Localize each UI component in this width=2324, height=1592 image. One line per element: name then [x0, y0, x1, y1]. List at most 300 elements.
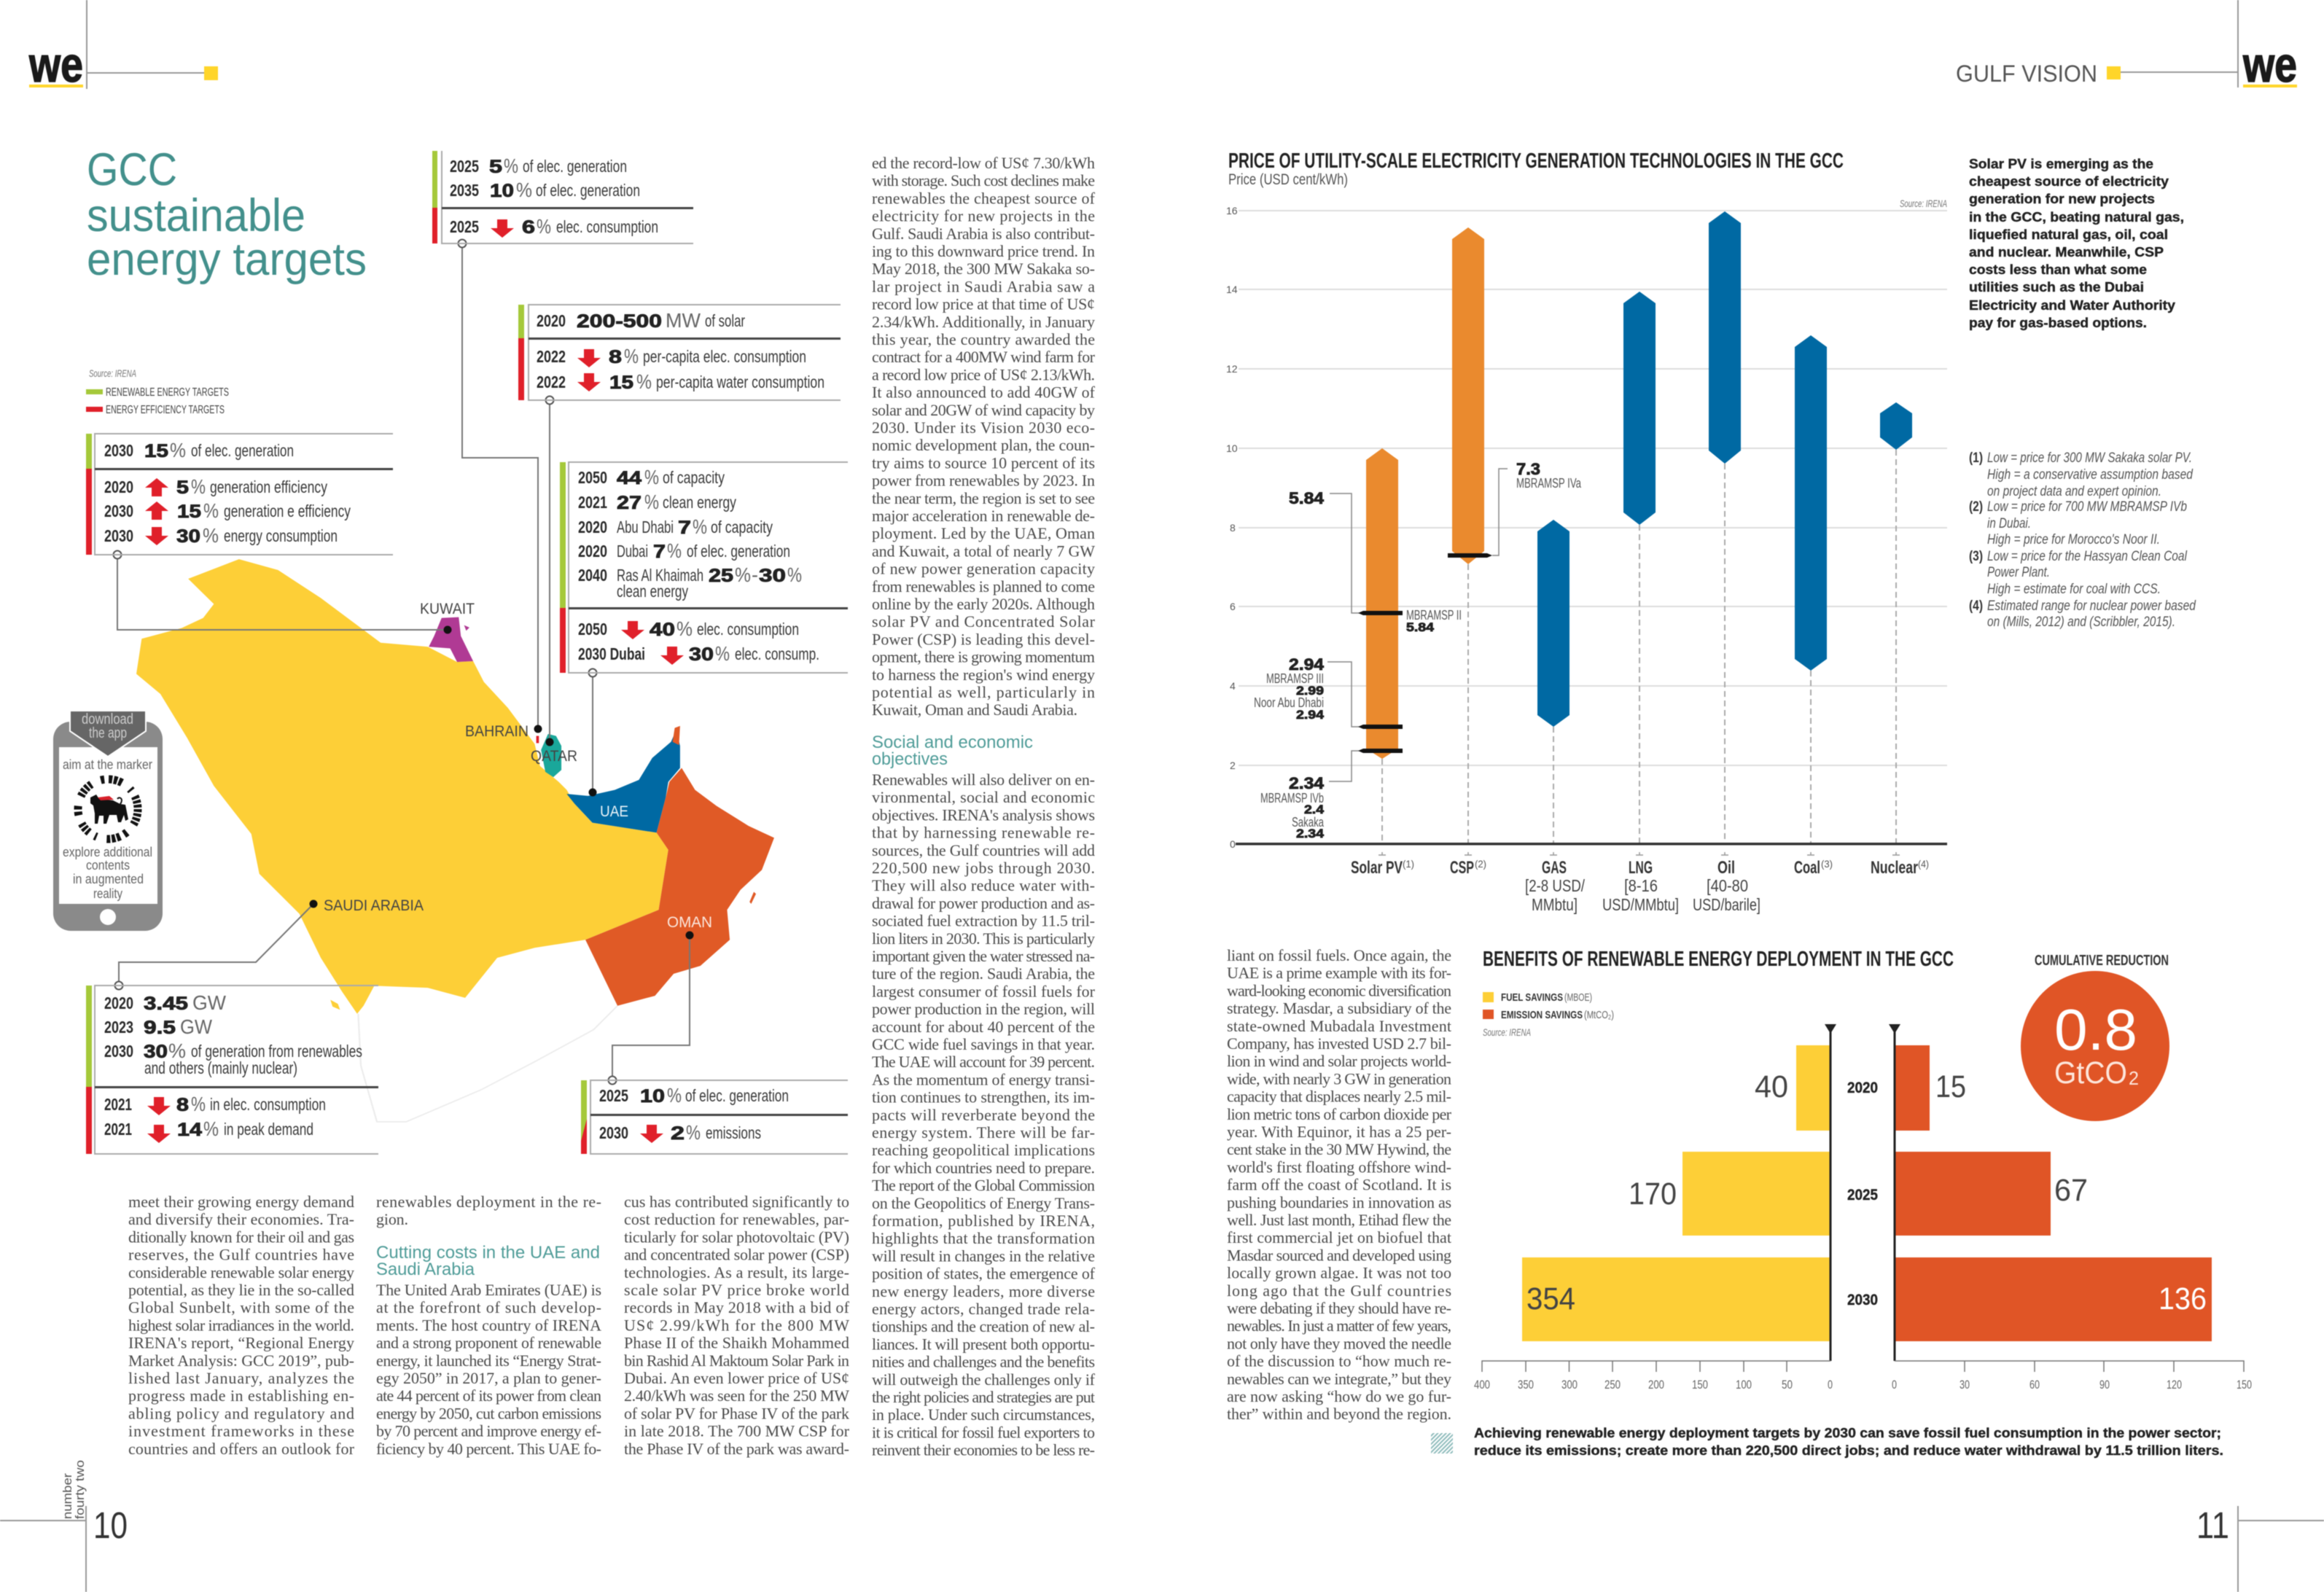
legend: (MBOE)	[1564, 991, 1592, 1004]
footnotes: on (Mills, 2012) and (Scribbler, 2015).	[1987, 614, 2175, 630]
row: 2035 10%: %	[516, 179, 532, 201]
article text column 4	[872, 154, 1096, 1459]
row: 2021 8%: in elec. consumption	[210, 1095, 326, 1114]
icon: phone, download the app	[53, 711, 163, 931]
row: 2022 8%: 2022	[537, 347, 566, 366]
row: 2021 27%: 2021	[578, 493, 607, 512]
connector lines	[114, 239, 694, 1085]
bars: emission savings: 136	[2159, 1281, 2207, 1316]
article text right page: wide, with nearly 3 GW in generation	[1227, 1069, 1451, 1088]
row: 2030 30%: energy consumption	[224, 526, 338, 545]
axes: 250	[1604, 1378, 1621, 1392]
article text right page: newables can we integrate,” but they	[1227, 1370, 1451, 1388]
axes: 150	[2237, 1378, 2252, 1392]
article text column 1: progress made in establishing en-	[128, 1386, 354, 1405]
category labels: Oil	[1717, 858, 1735, 878]
row: 2021 8%: %	[191, 1093, 206, 1115]
article text column 3: 2.40/kWh was seen for the 250 MW	[624, 1386, 849, 1405]
row: 2030 15%: %	[170, 439, 186, 461]
axes: 150	[1692, 1378, 1708, 1392]
country: Oman	[585, 726, 774, 1006]
article text column 4: Gulf. Saudi Arabia is also contribut-	[872, 225, 1095, 243]
axes: 400	[1474, 1378, 1490, 1392]
article text column 3: Dubai. An even lower price of US¢	[624, 1369, 849, 1387]
legend: targets: Source: IRENA	[89, 367, 136, 379]
category labels: Nuclear	[1871, 858, 1918, 878]
article text column 4: the right policies and strategies are put	[872, 1388, 1095, 1406]
y axis labels: 6	[1230, 601, 1236, 612]
article text column 4: liances. It will present both opportu-	[872, 1335, 1095, 1353]
article text column 1: abling policy and regulatory and	[128, 1404, 354, 1422]
row: 2025 5%: 5	[489, 157, 502, 177]
article text column 1: Market Analysis: GCC 2019”, pub-	[128, 1351, 354, 1370]
row: 2030 15%: 2030	[104, 441, 133, 460]
y axis labels: 16	[1226, 205, 1238, 216]
chart title	[1228, 149, 1844, 188]
article text column 4: potential as well, particularly in	[872, 683, 1095, 701]
price labels: 2.99	[1296, 684, 1324, 698]
row: 2020 5%: 5	[176, 477, 189, 498]
icon: phone, download the app: aim at the marker	[63, 757, 152, 772]
row: 2020 Abu Dhabi 7%: %	[693, 515, 707, 538]
row: 2050 44%: %	[644, 466, 659, 488]
price labels	[1254, 460, 1582, 840]
row: 2020 Abu Dhabi 7%	[578, 515, 773, 538]
row: 2040 Ras Al Khaimah: Ras Al Khaimah	[617, 566, 703, 585]
row: 2025 5%	[450, 155, 627, 177]
article text column 4: reinvent their economies to be less re-	[872, 1441, 1095, 1459]
category labels: (1)	[1403, 858, 1414, 870]
row: 2022 15%: 2022	[537, 372, 566, 391]
category labels: [40-80	[1707, 876, 1748, 895]
article text column 3: Phase II of the Shaikh Mohammed	[624, 1334, 849, 1352]
article text column 3: US¢ 2.99/kWh for the 800 MW	[624, 1316, 849, 1334]
row: 2021 27%: clean energy	[663, 493, 736, 512]
heading: social and economic objectives: Social and economic	[872, 733, 1033, 752]
article text column 3: in late 2018. The 700 MW CSP for	[624, 1422, 850, 1440]
footnotes: (1)	[1969, 450, 1983, 466]
category labels: MMbtu]	[1532, 895, 1578, 914]
title	[87, 144, 367, 285]
row: 2023 9.5 GW: 2023	[104, 1018, 133, 1037]
article text column 1: and diversify their economies. Tra-	[128, 1210, 354, 1228]
article text column 2: by 70 percent and improve energy ef-	[376, 1422, 601, 1440]
axes: 0	[1892, 1378, 1897, 1392]
footnotes: (4)	[1969, 598, 1983, 614]
row: 2020 Dubai 7%: 2020	[578, 542, 607, 561]
article text right page: were debating if they should have re-	[1227, 1299, 1451, 1317]
row: 2020 5%: %	[191, 475, 206, 498]
category labels: (3)	[1821, 858, 1833, 870]
row: 2020 Dubai 7%	[578, 539, 790, 562]
legend: targets: RENEWABLE ENERGY TARGETS	[106, 386, 229, 399]
logo: we: we	[2242, 37, 2297, 93]
article text column 1: meet their growing energy demand	[128, 1193, 354, 1211]
y axis labels: 2	[1230, 760, 1236, 771]
price labels: 2.94	[1296, 708, 1325, 722]
axes: 0	[1828, 1378, 1833, 1392]
row: 2025 5%: of elec. generation	[523, 157, 627, 176]
chart: price of electricity generation technologies	[1226, 149, 1947, 914]
y axis labels	[1226, 205, 1238, 850]
y axis labels: 10	[1226, 442, 1238, 454]
icon: end of article hatch square	[1431, 1433, 1453, 1454]
row: 2040 Ras Al Khaimah: 2040	[578, 566, 607, 585]
article text column 2: energy by 2050, cut carbon emissions	[376, 1404, 601, 1422]
category labels: Coal	[1794, 858, 1820, 878]
article text column 4: 2030. Under its Vision 2030 eco-	[872, 418, 1095, 437]
article text column 1: IRENA's report, “Regional Energy	[128, 1334, 354, 1352]
row: 2021 27%: 27	[617, 493, 642, 513]
row: 2021 14%	[104, 1117, 313, 1143]
footnotes: on project data and expert opinion.	[1987, 484, 2161, 499]
article text column 3: and concentrated solar power (CSP)	[624, 1246, 849, 1264]
row: 2022 15%: per-capita water consumption	[656, 372, 824, 391]
bars: fuel savings	[1522, 1045, 1830, 1341]
article text column 2: and a strong proponent of renewable	[376, 1334, 601, 1352]
article text column 4: of new power generation capacity	[872, 560, 1095, 578]
article text right page: Masdar sourced and developed using	[1227, 1246, 1451, 1264]
article text column 4: ployment. Led by the UAE, Oman	[872, 524, 1095, 542]
row: 2030 Dubai 30%: 30	[689, 644, 714, 665]
callout: solar PV text: utilities such as the Dubai	[1969, 280, 2144, 294]
row: 2030 15%: %	[203, 499, 219, 522]
footnotes: in Dubai.	[1987, 516, 2031, 531]
article text right page: UAE is a prime example with its for-	[1227, 964, 1451, 982]
article text column 4: formation, published by IRENA,	[872, 1211, 1095, 1230]
article text column 1: potential, as they lie in the so-called	[128, 1281, 354, 1299]
article text column 3: bin Rashid Al Maktoum Solar Park in	[624, 1351, 849, 1370]
row: 2020 3.45 GW: 2020	[104, 994, 133, 1012]
left page footer: number	[61, 1473, 74, 1519]
title: GCC	[87, 144, 177, 195]
row: 2025 5%: 2025	[450, 157, 479, 176]
category labels: (2)	[1475, 858, 1486, 870]
article text right page: pushing boundaries in innovation as	[1227, 1193, 1451, 1211]
chart: price of electricity generation technologies: Source: IRENA	[1900, 198, 1947, 209]
price labels: MBRAMSP III	[1266, 671, 1324, 686]
axes: 350	[1518, 1378, 1534, 1392]
row: 2030 30%: 30	[176, 526, 200, 547]
row: 2025 10%: 2025	[599, 1086, 628, 1105]
article text column 4: it is critical for fossil fuel exporters to	[872, 1423, 1095, 1441]
article text column 4: lion liters in 2030. This is particularly	[872, 929, 1095, 948]
article text column 4: solar PV and Concentrated Solar	[872, 612, 1096, 631]
article text column 3: ticularly for solar photovoltaic (PV)	[624, 1228, 849, 1246]
article text column 1: ditionally known for their oil and gas	[128, 1228, 354, 1246]
legend: EMISSION SAVINGS	[1501, 1009, 1583, 1021]
row: 2025 10%: 10	[640, 1086, 665, 1107]
article text right page: lion metric tons of carbon dioxide per	[1227, 1105, 1452, 1123]
row: 2021 14%: %	[203, 1117, 219, 1140]
axes	[1474, 1024, 2252, 1392]
icon: phone, download the app: download	[82, 711, 133, 727]
icon: phone, download the app: contents	[86, 858, 130, 873]
article text column 3: cus has contributed significantly to	[624, 1193, 849, 1211]
article text column 4: objectives. IRENA's analysis shows	[872, 805, 1095, 824]
category labels: CSP	[1450, 858, 1474, 878]
panel: targets, Qatar	[518, 305, 841, 400]
article text column 4: important given the water stressed na-	[872, 947, 1095, 965]
article text right page: strategy. Masdar, a subsidiary of the	[1227, 999, 1451, 1018]
article text column 4: electricity for new projects in the	[872, 207, 1095, 225]
panel: targets, UAE	[560, 462, 848, 673]
icon: phone, download the app: the app	[89, 725, 127, 741]
row: 2035 10%	[450, 179, 640, 201]
row: 2023 9.5 GW: GW	[180, 1015, 213, 1038]
article text column 4: major acceleration in renewable de-	[872, 507, 1095, 525]
article text column 2: ficiency by 40 percent. This UAE fo-	[376, 1440, 601, 1458]
year labels	[1847, 1080, 1878, 1308]
icon: phone, download the app: in augmented	[73, 872, 144, 886]
price labels: 2.4	[1304, 803, 1325, 816]
row: 2020 Dubai 7%: Dubai	[617, 542, 648, 561]
article text right page: newables. In just a matter of few years,	[1227, 1316, 1451, 1335]
axes: 300	[1561, 1378, 1578, 1392]
article text column 4: on the Geopolitics of Energy Trans-	[872, 1194, 1095, 1212]
article text right page: year. With Equinor, it has a 25 per-	[1227, 1123, 1451, 1141]
price labels: MBRAMSP IVb	[1260, 791, 1324, 805]
row: 2030 30%: 30	[144, 1042, 168, 1062]
row: 2050 40%: 2050	[578, 620, 607, 639]
article text column 2: renewables deployment in the re-	[376, 1193, 601, 1211]
row: 2035 10%: of elec. generation	[536, 181, 640, 200]
row: 2030 30%	[104, 524, 338, 547]
article text column 4: power from renewables by 2023. In	[872, 472, 1095, 490]
callout: solar PV text: costs less than what some	[1969, 262, 2147, 277]
price labels: 7.3	[1516, 460, 1540, 478]
y axis labels: 12	[1226, 363, 1238, 375]
range bar: CSP	[1452, 227, 1484, 564]
row: 2020 3.45 GW: GW	[192, 991, 227, 1014]
caption: achieving targets: Achieving renewable energy deployment targets by 2030 can save fossil fuel consumption in the power sector;	[1474, 1426, 2221, 1440]
row: 2030 15%	[104, 499, 351, 522]
article text right page: first commercial jet on biofuel that	[1227, 1228, 1451, 1246]
left page header	[28, 0, 218, 93]
article text right page	[1227, 946, 1452, 1423]
price markers and connectors	[1327, 469, 1508, 781]
map labels: OMAN	[667, 914, 712, 931]
row: 2050 44%: of capacity	[663, 468, 725, 487]
row: 2021 27%: %	[644, 491, 659, 513]
article text column 1: investment frameworks in these	[128, 1422, 354, 1440]
right page footer	[2196, 1505, 2324, 1592]
article text column 3: the Phase IV of the park was award-	[624, 1440, 849, 1458]
article text column 4: 2.34/kWh. Additionally, in January	[872, 313, 1095, 331]
bars: fuel savings: 354	[1526, 1281, 1575, 1316]
row: 2030 Dubai 30%: %	[715, 642, 730, 665]
row: 2021 8%	[104, 1093, 326, 1115]
row: 2030 15%: 15	[177, 502, 201, 522]
axes: 50	[1782, 1378, 1793, 1392]
article text column 2: The United Arab Emirates (UAE) is	[376, 1281, 601, 1299]
country: Qatar	[541, 734, 561, 777]
map labels: UAE	[600, 803, 628, 820]
row: 2021 8%: 8	[176, 1095, 189, 1115]
row: 2040 Ras Al Khaimah: 25	[709, 566, 733, 586]
article text right page: not only have they moved the needle	[1227, 1334, 1451, 1352]
row: 2030 2%	[599, 1121, 761, 1144]
row: 2020 5%	[104, 475, 327, 498]
article text column 3: records in May 2018 with a bid of	[624, 1298, 850, 1316]
article text column 4: for which countries need to prepare.	[872, 1158, 1095, 1177]
row: 2020 Dubai 7%: %	[667, 539, 682, 562]
article text column 4: in place. Under such circumstances,	[872, 1405, 1095, 1424]
article text column 1: Global Sunbelt, with some of the	[128, 1298, 354, 1316]
map labels: SAUDI ARABIA	[324, 897, 424, 914]
range bar: Gas	[1537, 520, 1570, 727]
right page footer: 11	[2196, 1505, 2229, 1546]
axes: 90	[2099, 1378, 2110, 1392]
category labels: USD/MMbtu]	[1602, 895, 1679, 914]
article text column 3: technologies. As a result, its large-	[624, 1263, 849, 1281]
row: 2020 5%: generation efficiency	[210, 477, 327, 496]
row: 2030 30%: 2030	[104, 1042, 133, 1061]
row: 2023 9.5 GW: 9.5	[144, 1018, 176, 1038]
article text column 3: of solar PV for Phase IV of the park	[624, 1404, 849, 1422]
row: 2022 15%: 15	[609, 372, 633, 393]
article text column 4: tionships and the creation of new al-	[872, 1317, 1095, 1335]
row: 2025 6%: 2025	[450, 217, 479, 236]
icon: phone, download the app: reality	[93, 886, 122, 901]
tab: download	[70, 711, 146, 757]
row: 2030 Dubai 30%: elec. consump.	[735, 644, 819, 663]
heading: cutting costs: Saudi Arabia	[376, 1260, 475, 1279]
article text column 4: a record low price of US¢ 2.13/kWh.	[872, 365, 1095, 383]
map labels: KUWAIT	[420, 601, 475, 617]
legend: targets: ENERGY EFFICIENCY TARGETS	[106, 404, 225, 416]
article text column 4: new energy leaders, more diverse	[872, 1282, 1095, 1300]
heading: social and economic objectives	[872, 733, 1033, 769]
panel: targets, Oman	[581, 1080, 848, 1154]
row: 2030 Dubai 30%: 2030 Dubai	[578, 644, 645, 663]
year labels: 2030	[1847, 1292, 1878, 1308]
row: 2022 8%: 8	[609, 347, 622, 367]
footnotes: Low = price for the Hassyan Clean Coal	[1987, 549, 2188, 564]
right page header	[1956, 0, 2297, 93]
article text right page: lion in wind and solar projects world-	[1227, 1052, 1451, 1070]
year labels: 2025	[1847, 1187, 1878, 1203]
country: Saudi Arabia	[136, 559, 668, 1014]
axes: 60	[2029, 1378, 2040, 1392]
article text column 4: They will also reduce water with-	[872, 876, 1095, 894]
row: 2030 30%: 2030	[104, 526, 133, 545]
left page footer: fourty two	[73, 1460, 87, 1519]
article text column 4: account for about 40 percent of the	[872, 1018, 1095, 1036]
row: 2050 40%: 40	[650, 620, 675, 640]
right page header: GULF VISION	[1956, 61, 2097, 87]
row: 2021 14%: 2021	[104, 1120, 132, 1139]
row: 2022 15%: %	[636, 370, 652, 393]
article text column 4: The UAE will account for 39 percent.	[872, 1053, 1095, 1071]
row: 2040 Ras Al Khaimah	[578, 563, 802, 601]
row: 2023 9.5 GW	[104, 1015, 213, 1038]
bars: emission savings: 67	[2054, 1173, 2088, 1208]
row: 2050 40%	[578, 617, 799, 640]
title: energy targets	[87, 234, 367, 285]
price labels: 5.84	[1406, 620, 1435, 634]
article text column 4: sociated fuel extraction by 11.5 tril-	[872, 912, 1095, 930]
callout: solar PV text: liquefied natural gas, oil, coal	[1969, 227, 2168, 242]
bars: fuel savings: 170	[1629, 1177, 1677, 1211]
article text column 4: and Kuwait, a total of nearly 7 GW	[872, 542, 1095, 560]
legend: Source: IRENA	[1483, 1026, 1531, 1038]
axes: 30	[1960, 1378, 1970, 1392]
row: 2020 Abu Dhabi 7%: Abu Dhabi	[617, 518, 674, 536]
row: 2025 5%: %	[504, 155, 518, 177]
legend	[1483, 991, 1614, 1038]
heading: cutting costs	[376, 1243, 600, 1279]
legend: FUEL SAVINGS	[1501, 991, 1563, 1004]
footnotes: High = a conservative assumption based	[1987, 467, 2194, 483]
map labels: BAHRAIN	[465, 723, 529, 740]
article text column 4: power production in the region, will	[872, 1000, 1095, 1018]
article text column 3: cost reduction for renewables, par-	[624, 1210, 849, 1228]
article text column 4: drawal for power production and as-	[872, 894, 1095, 912]
article text column 4: with storage. Such cost declines make	[872, 171, 1095, 190]
cumulative reduction badge: GtCO	[2054, 1056, 2127, 1090]
caption: achieving targets	[1474, 1426, 2223, 1458]
callout: solar PV text: cheapest source of electricity	[1969, 174, 2169, 189]
article text column 4: sources, the Gulf countries will add	[872, 841, 1095, 859]
row: 2040 Ras Al Khaimah: %	[735, 563, 751, 586]
row: 2020 Abu Dhabi 7%: 7	[678, 518, 691, 538]
article text column 4: GCC wide fuel savings in that year.	[872, 1035, 1095, 1053]
article text column 4: that by harnessing renewable re-	[872, 824, 1095, 842]
row: 2030 30%	[104, 1039, 362, 1077]
row: 2020 3.45 GW	[104, 991, 227, 1014]
row: 2020 200-500 MW: 200-500	[577, 311, 662, 332]
row: 2025 6%: elec. consumption	[556, 217, 658, 236]
article text column 4: from renewables is planned to come	[872, 577, 1095, 596]
cumulative reduction badge: CUMULATIVE REDUCTION	[2035, 953, 2169, 969]
article text right page: world's first floating offshore wind-	[1227, 1158, 1451, 1176]
category labels: [2-8 USD/	[1525, 876, 1585, 895]
row: 2050 40%: elec. consumption	[697, 620, 799, 639]
category labels: (4)	[1918, 858, 1929, 870]
article text column 4: tion continues to strengthen, its im-	[872, 1088, 1095, 1107]
caption: achieving targets: reduce its emissions; create more than 220,500 direct jobs; and reduce water withdrawal by 11.5 trillion liters.	[1474, 1443, 2223, 1458]
axes: 200	[1648, 1378, 1664, 1392]
row: 2035 10%: 10	[490, 181, 514, 201]
article text column 4: the near term, the region is set to see	[872, 489, 1095, 507]
article text column 3	[624, 1193, 850, 1458]
range bar: Coal	[1795, 335, 1827, 671]
price labels: 2.94	[1289, 655, 1325, 674]
row: 2022 8%	[537, 345, 806, 367]
row: 2030 2%: emissions	[706, 1123, 761, 1142]
map labels: QATAR	[531, 748, 577, 765]
row: 2025 10%: %	[667, 1084, 682, 1107]
range bar: Oil	[1709, 211, 1741, 464]
article text column 2: energy, it launched its “Energy Strat-	[376, 1351, 601, 1370]
row: 2022 8%: per-capita elec. consumption	[643, 347, 806, 366]
price labels: 2.34	[1289, 774, 1325, 792]
article text column 1: highest solar irradiances in the world.	[128, 1316, 354, 1334]
article text right page: of the discussion to “how much re-	[1227, 1352, 1451, 1370]
footnotes: Low = price for 300 MW Sakaka solar PV.	[1987, 450, 2192, 466]
row: 2020 200-500 MW: MW	[666, 309, 701, 332]
article text column 4: largest consumer of fossil fuels for	[872, 982, 1096, 1000]
y axis labels: 0	[1230, 838, 1236, 850]
yellow square	[204, 66, 218, 80]
article text right page: capacity that displaces nearly 2.5 mil-	[1227, 1088, 1451, 1106]
bars: emission savings	[1895, 1045, 2212, 1341]
article text column 4: nomic development plan, the coun-	[872, 436, 1095, 454]
article text column 4: ed the record-low of US¢ 7.30/kWh	[872, 154, 1095, 172]
row: 2030 15%: generation e efficiency	[224, 502, 351, 520]
article text column 4: opment, there is growing momentum	[872, 648, 1095, 666]
